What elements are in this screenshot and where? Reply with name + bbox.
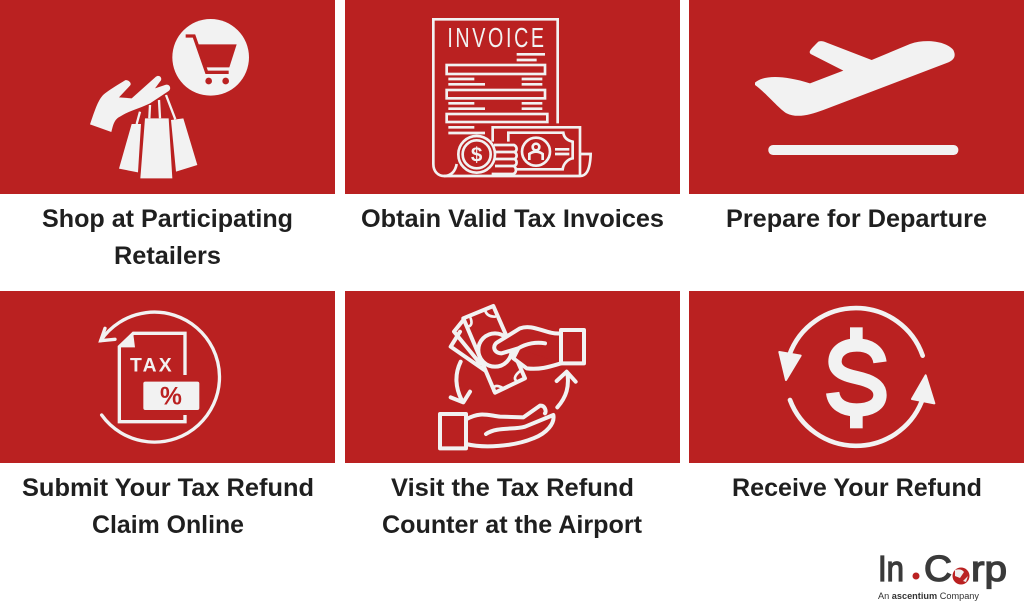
label: Visit the Tax Refund — [391, 474, 634, 502]
panel background — [345, 291, 680, 463]
label: Claim Online — [92, 511, 244, 539]
panel background — [689, 291, 1024, 463]
panel: visit the tax refund counter — [345, 291, 680, 539]
icon: tax document with percent badge — [101, 312, 219, 442]
label — [22, 474, 314, 539]
panel: prepare for departure — [689, 0, 1024, 233]
logo: InCorp: An ascentium Company — [878, 591, 979, 601]
label: Shop at Participating — [42, 205, 293, 233]
label — [382, 474, 643, 539]
icon: invoice with cash and coins — [433, 19, 591, 176]
label: Obtain Valid Tax Invoices — [361, 205, 664, 233]
label: Retailers — [114, 242, 221, 270]
label — [42, 205, 293, 270]
label: Submit Your Tax Refund — [22, 474, 314, 502]
panel background — [0, 291, 335, 463]
panel: receive your refund — [689, 291, 1024, 502]
logo: InCorp: rp — [971, 548, 1007, 589]
icon: hands exchanging money — [440, 306, 584, 448]
panel background — [689, 0, 1024, 194]
label: Counter at the Airport — [382, 511, 643, 539]
panel background — [0, 0, 335, 194]
panel background — [345, 0, 680, 194]
icon: tax document with percent badge: % — [160, 384, 182, 411]
logo: InCorp: C — [924, 548, 952, 589]
icon: tax document with percent badge: TAX — [130, 356, 172, 377]
panel: submit your tax refund claim online — [0, 291, 335, 539]
logo: InCorp: In — [878, 548, 904, 589]
label: Prepare for Departure — [726, 205, 987, 233]
icon: hand with shopping bags and cart — [90, 19, 249, 178]
panel: shop at participating retailers — [0, 0, 335, 270]
icon: invoice with cash and coins: $ — [471, 144, 483, 167]
icon: plane taking off — [755, 41, 958, 155]
logo: InCorp — [878, 548, 1007, 601]
label: Receive Your Refund — [732, 474, 982, 502]
icon: dollar sign with circular arrows — [779, 308, 934, 446]
panel: obtain valid tax invoices — [345, 0, 680, 233]
icon: invoice with cash and coins: INVOICE — [447, 23, 547, 54]
